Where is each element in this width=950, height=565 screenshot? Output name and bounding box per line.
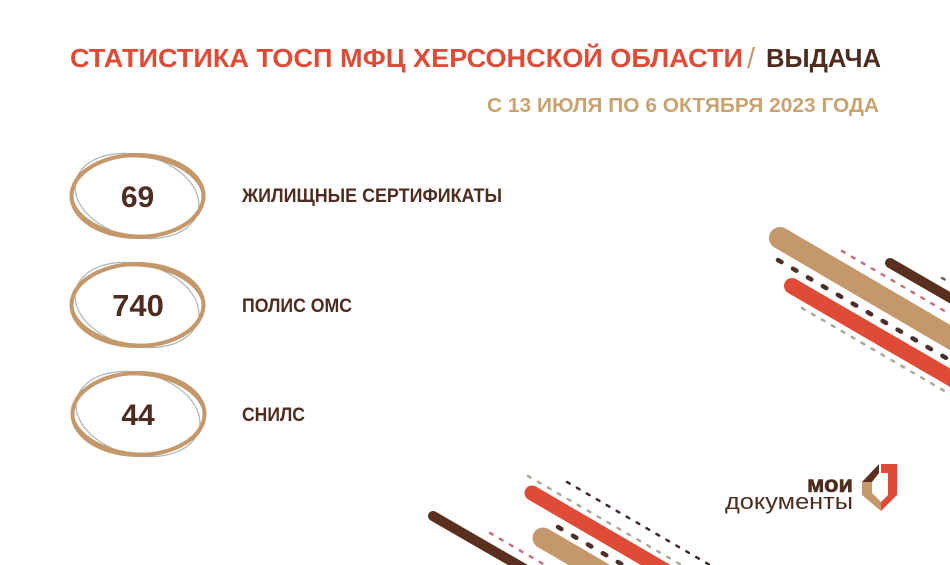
logo icon: shield <box>862 464 897 511</box>
subtitle: date range: С 13 ИЮЛЯ ПО 6 ОКТЯБРЯ 2023 ГОДА <box>487 95 879 117</box>
logo text: документы <box>725 489 853 514</box>
circled number 69: 69 <box>121 181 154 214</box>
stat: 740 OMS policy <box>66 250 352 360</box>
title: / <box>747 43 756 75</box>
logo text <box>725 471 853 514</box>
logo text: мои <box>807 471 853 497</box>
circled number 44: 44 <box>121 399 155 432</box>
label: СНИЛС <box>242 405 305 426</box>
label: ЖИЛИЩНЫЕ СЕРТИФИКАТЫ <box>241 186 502 207</box>
title: СТАТИСТИКА ТОСП МФЦ ХЕРСОНСКОЙ ОБЛАСТИ <box>70 43 743 73</box>
stat: 69 housing certificates <box>66 141 502 251</box>
decorative stripes bottom <box>433 476 715 565</box>
circled number 740 <box>66 250 208 360</box>
decorative stripes right <box>778 238 950 400</box>
title: ВЫДАЧА <box>766 43 881 73</box>
circled number 69 <box>66 141 208 251</box>
label: ПОЛИС ОМС <box>242 296 352 317</box>
stat: 44 SNILS <box>67 359 305 469</box>
circled number 740: 740 <box>112 288 164 323</box>
circled number 44 <box>67 359 209 469</box>
logo: Мои документы <box>725 464 897 514</box>
